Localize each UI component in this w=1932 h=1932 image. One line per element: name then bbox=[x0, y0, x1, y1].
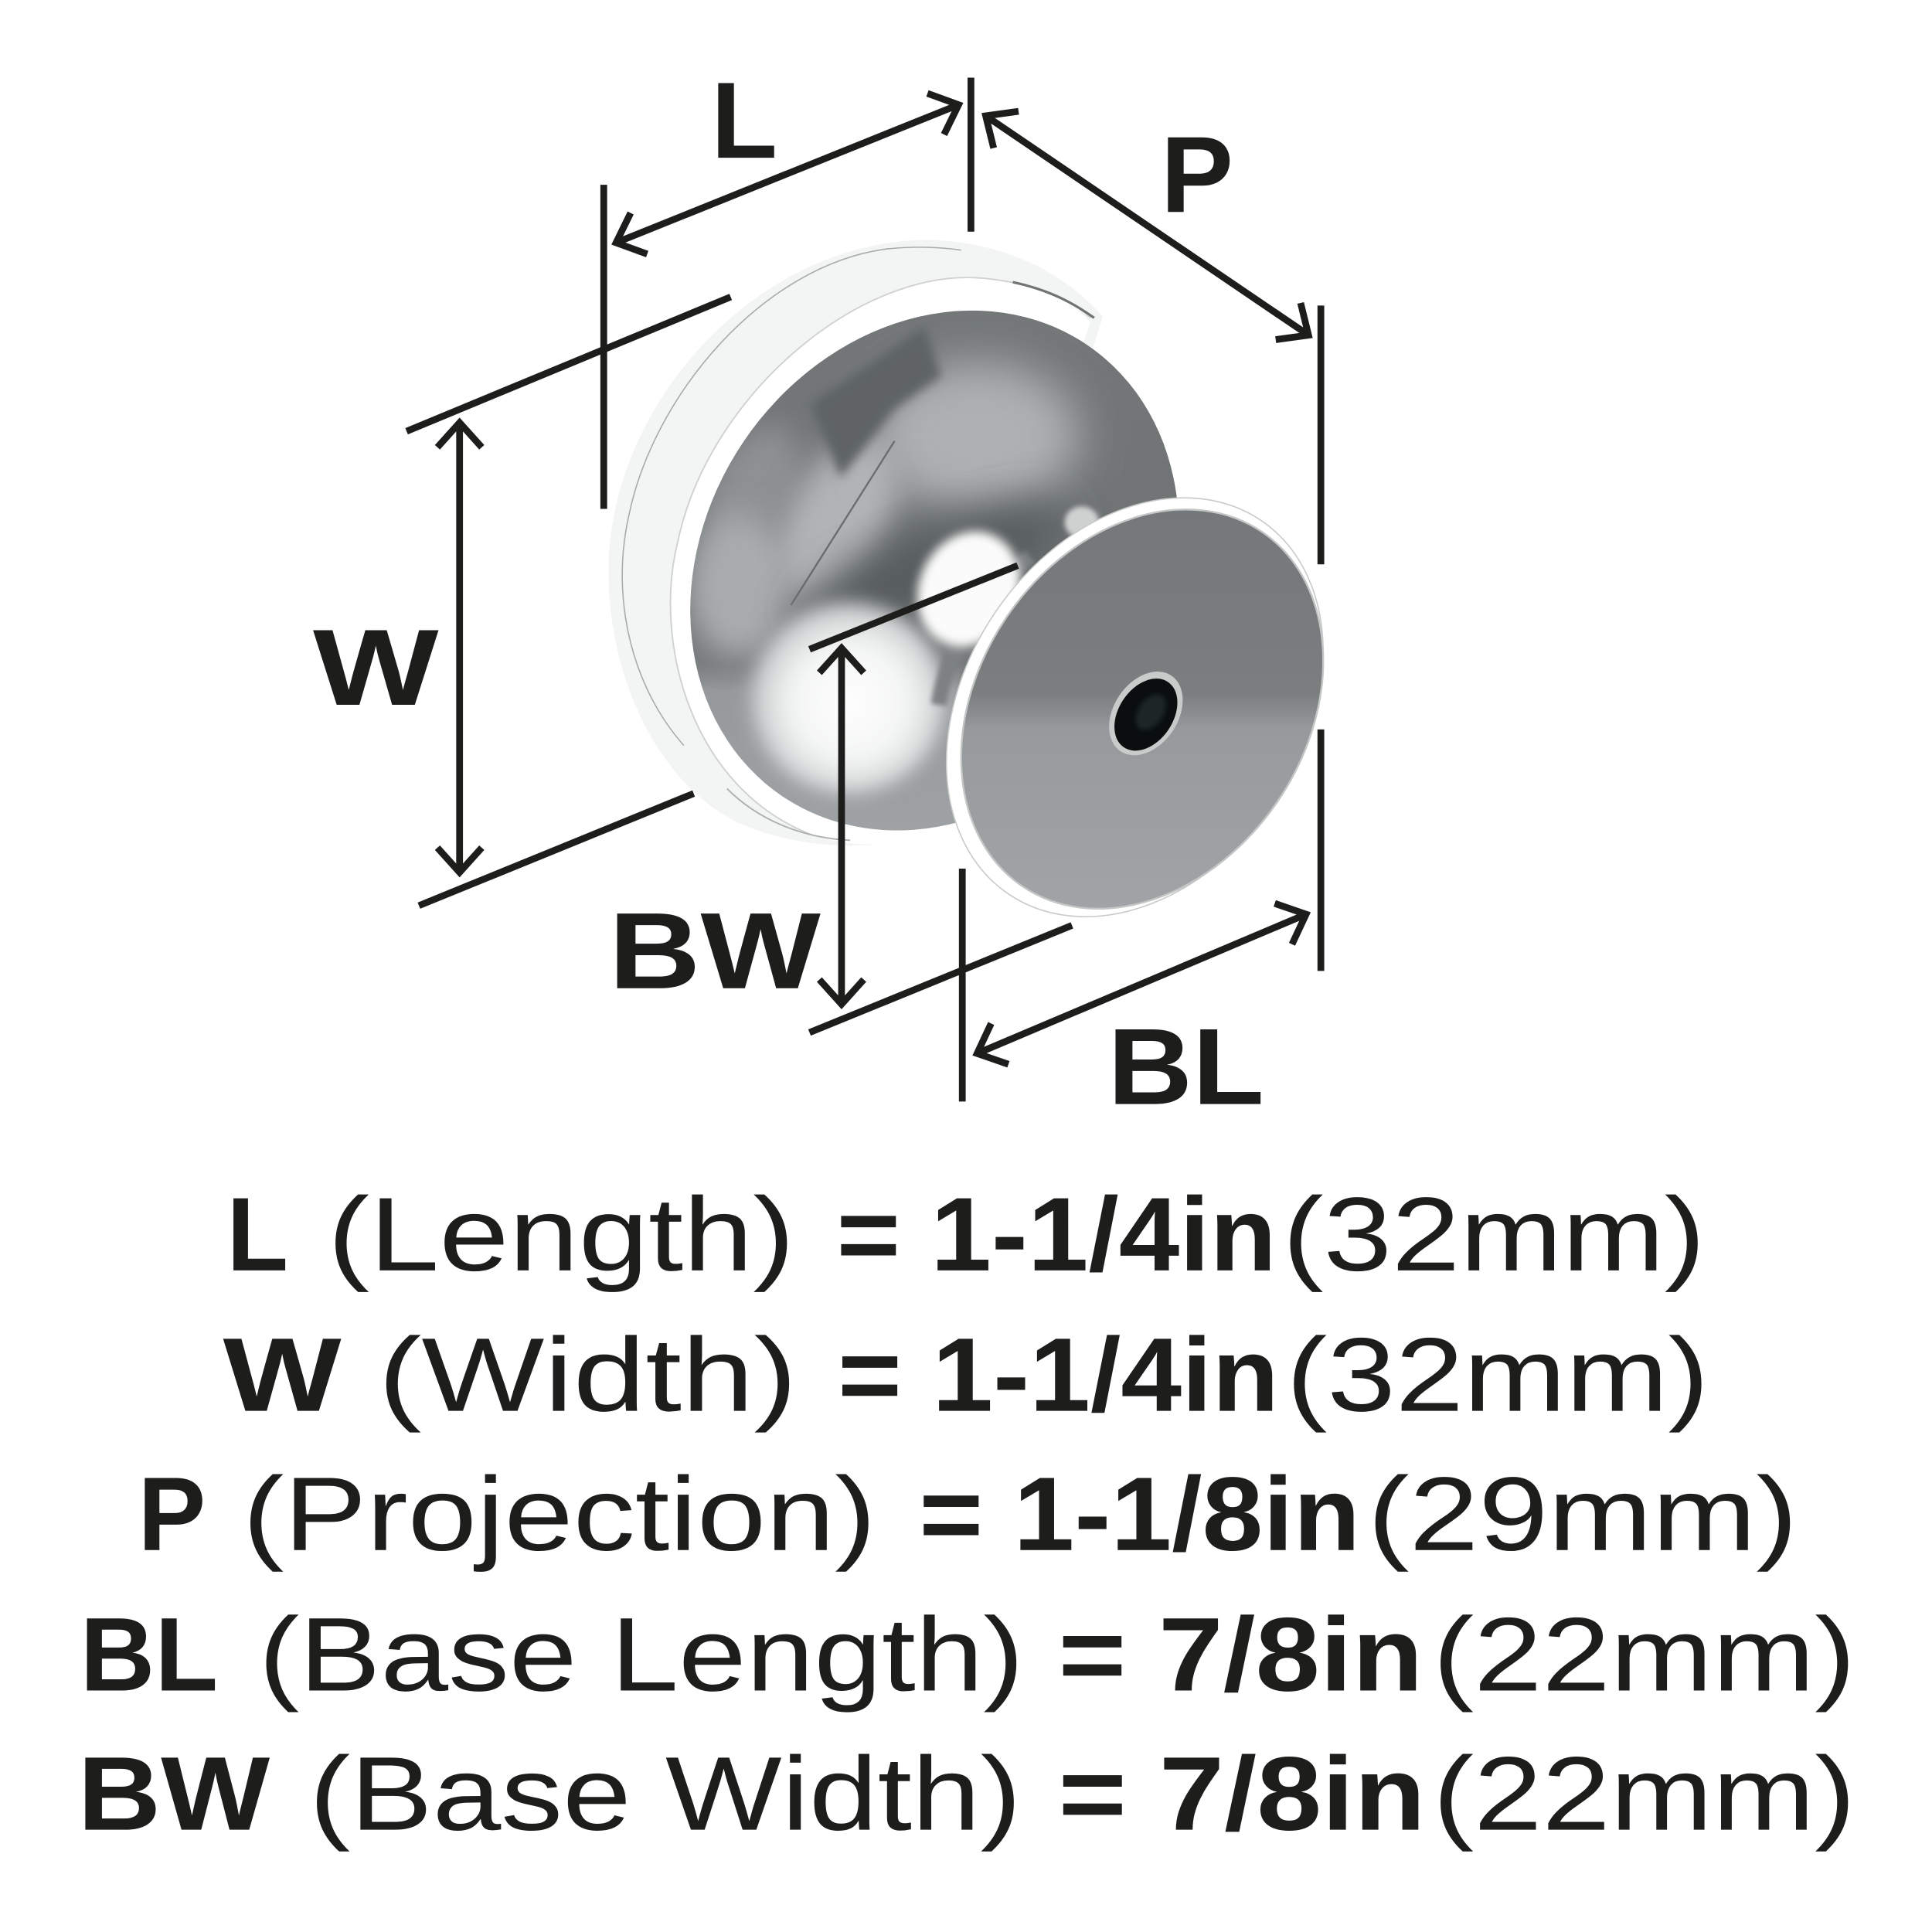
knob screw hole bbox=[1094, 658, 1198, 769]
dimension BL bbox=[962, 730, 1321, 1101]
spec line: projection: P bbox=[138, 1455, 206, 1573]
spec line: base length bbox=[80, 1595, 1855, 1713]
spec line: length: (32mm) bbox=[1283, 1175, 1706, 1293]
label L: L bbox=[711, 60, 777, 181]
dimension BW bbox=[810, 566, 1072, 1032]
spec line: width: (Width) bbox=[378, 1316, 798, 1434]
spec line: base length: (Base Length) bbox=[259, 1595, 1024, 1713]
spec line: projection bbox=[138, 1455, 1798, 1573]
spec line: base width: (Base Width) bbox=[309, 1735, 1022, 1852]
spec line: width bbox=[223, 1316, 1709, 1434]
label BL: BL bbox=[1107, 1006, 1264, 1128]
label BW: BW bbox=[609, 890, 821, 1012]
knob rim bbox=[671, 277, 1094, 845]
knob base plate bbox=[946, 497, 1325, 917]
spec line: base width: (22mm) bbox=[1433, 1735, 1855, 1852]
spec line: base length: (22mm) bbox=[1433, 1595, 1855, 1713]
knob face with reflections bbox=[690, 311, 1177, 830]
spec line: projection: = 1-1/8in bbox=[919, 1455, 1360, 1573]
spec line: length: = 1-1/4in bbox=[837, 1175, 1277, 1293]
spec line: base length: BL bbox=[80, 1595, 218, 1713]
spec line: base width bbox=[77, 1735, 1855, 1852]
spec line: base width: BW bbox=[77, 1735, 270, 1852]
spec line: length: (Length) bbox=[328, 1175, 794, 1293]
label W: W bbox=[313, 607, 439, 728]
dimension W bbox=[406, 297, 730, 906]
label P: P bbox=[1161, 114, 1233, 235]
spec line: width: W bbox=[223, 1316, 342, 1434]
spec line: base length: = 7/8in bbox=[1059, 1595, 1423, 1713]
knob illustration bbox=[609, 240, 1325, 917]
knob back body bbox=[608, 240, 1103, 845]
dimension L bbox=[604, 77, 971, 509]
spec line: length: L bbox=[226, 1175, 288, 1293]
spec line: length bbox=[226, 1175, 1706, 1293]
spec line: projection: (29mm) bbox=[1368, 1455, 1798, 1573]
dimension P bbox=[986, 116, 1321, 564]
spec line: base width: = 7/8in bbox=[1059, 1735, 1426, 1852]
spec line: width: (32mm) bbox=[1287, 1316, 1709, 1434]
spec line: width: = 1-1/4in bbox=[838, 1316, 1279, 1434]
spec line: projection: (Projection) bbox=[243, 1455, 876, 1573]
knob neck bbox=[899, 506, 1099, 705]
